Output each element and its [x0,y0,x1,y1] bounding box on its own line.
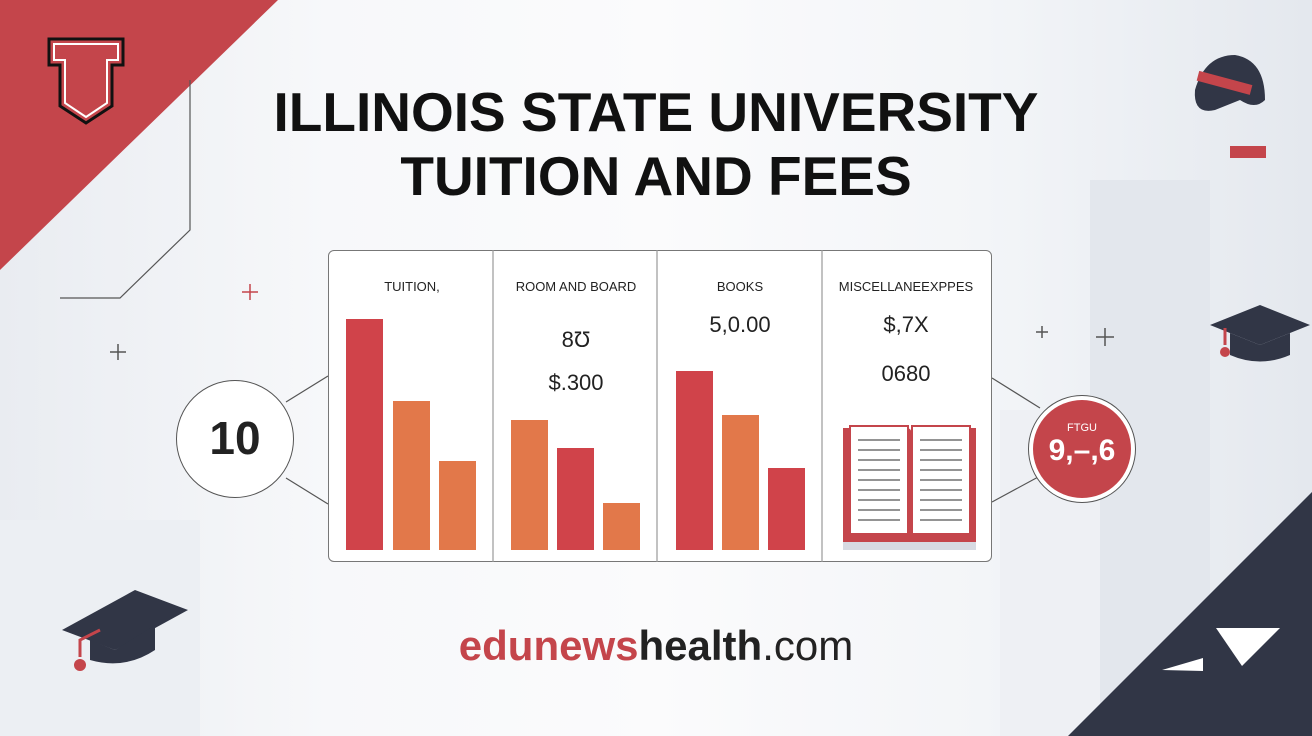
panel: cost chart: TUITION, [384,279,440,294]
bars: books [676,371,805,550]
title: ILLINOIS STATE UNIVERSITY [274,81,1038,143]
callout: left circle: 10 [209,412,261,464]
icon: graduation cap right [1210,305,1310,362]
title: TUITION AND FEES [400,145,912,207]
callout: left circle [176,380,294,498]
logo icon [48,38,124,125]
icon: open book [843,426,976,550]
panel: cost chart: $.300 [548,370,604,395]
callout: right circle [1028,395,1136,503]
panel: cost chart: 0680 [882,361,930,386]
callout: right circle: 9,–,6 [1049,434,1115,467]
panel: cost chart [328,250,992,562]
footer: website: edunewshealth.com [459,622,853,669]
callout: right circle: FTGU [1067,422,1097,434]
panel: cost chart: MISCELLANEEXPPES [839,279,974,294]
icon: graduation cap top right [1194,55,1265,111]
bars: room and board [511,420,640,550]
icon: graduation cap left [62,590,188,671]
panel: cost chart: ROOM AND BOARD [516,279,636,294]
bars: tuition [346,319,476,550]
title [274,81,1038,207]
panel: cost chart: BOOKS [717,279,763,294]
panel: cost chart: $,7X [883,312,929,337]
panel: cost chart: 8Ʊ [562,327,590,352]
panel: cost chart: 5,0.00 [709,312,771,337]
